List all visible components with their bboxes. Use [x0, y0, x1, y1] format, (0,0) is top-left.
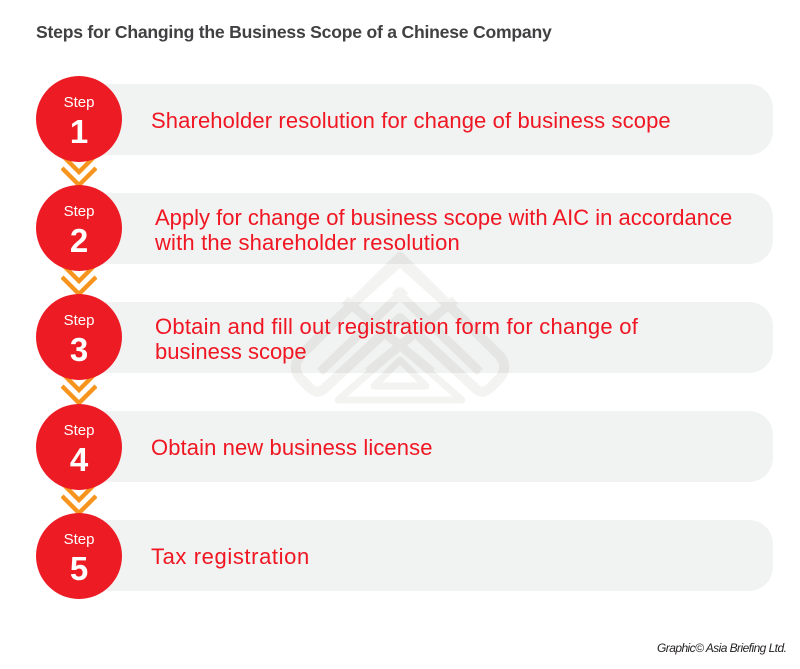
badge: step 5: 5 [70, 550, 88, 587]
badge: step 4: Step [64, 422, 94, 439]
credit: Graphic© Asia Briefing Ltd. [657, 641, 786, 655]
badge: step 4 [36, 404, 122, 490]
arrow: step 2 to 3 [61, 268, 97, 294]
title: Steps for Changing the Business Scope of a Chinese Company [36, 22, 552, 42]
watermark logo [291, 252, 509, 404]
text: step 3 [155, 314, 638, 364]
panel: step 3 text bar [95, 302, 773, 373]
text: step 4: Obtain new business license [151, 435, 433, 460]
panel: step 1 text bar [95, 84, 773, 155]
panel: step 2 text bar [95, 193, 773, 264]
badge: step 2: Step [64, 203, 94, 220]
arrow: step 4 to 5 [61, 486, 97, 514]
badge: step 2: 2 [70, 222, 88, 259]
badge: step 4: 4 [70, 441, 88, 478]
badge: step 5 [36, 513, 122, 599]
badge: step 3 [36, 294, 122, 380]
badge: step 3: Step [64, 312, 94, 329]
badge: step 1: Step [64, 94, 94, 111]
arrow: step 1 to 2 [61, 158, 97, 186]
panel: step 5 text bar [95, 520, 773, 591]
panel: step 4 text bar [95, 411, 773, 482]
badge: step 3: 3 [70, 331, 88, 368]
text: step 5: Tax registration [151, 544, 310, 569]
text: step 2: with the shareholder resolution [155, 230, 460, 255]
text: step 2 [155, 205, 732, 255]
text: step 2: Apply for change of business scope with AIC in accordance [155, 205, 732, 230]
badge: step 1 [36, 76, 122, 162]
arrow: step 3 to 4 [61, 376, 97, 404]
badge: step 5: Step [64, 531, 94, 548]
text: step 1: Shareholder resolution for change of business scope [151, 108, 671, 133]
badge: step 1: 1 [70, 113, 88, 150]
text: step 3: Obtain and fill out registration form for change of [155, 314, 638, 339]
badge: step 2 [36, 185, 122, 271]
text: step 3: business scope [155, 339, 307, 364]
